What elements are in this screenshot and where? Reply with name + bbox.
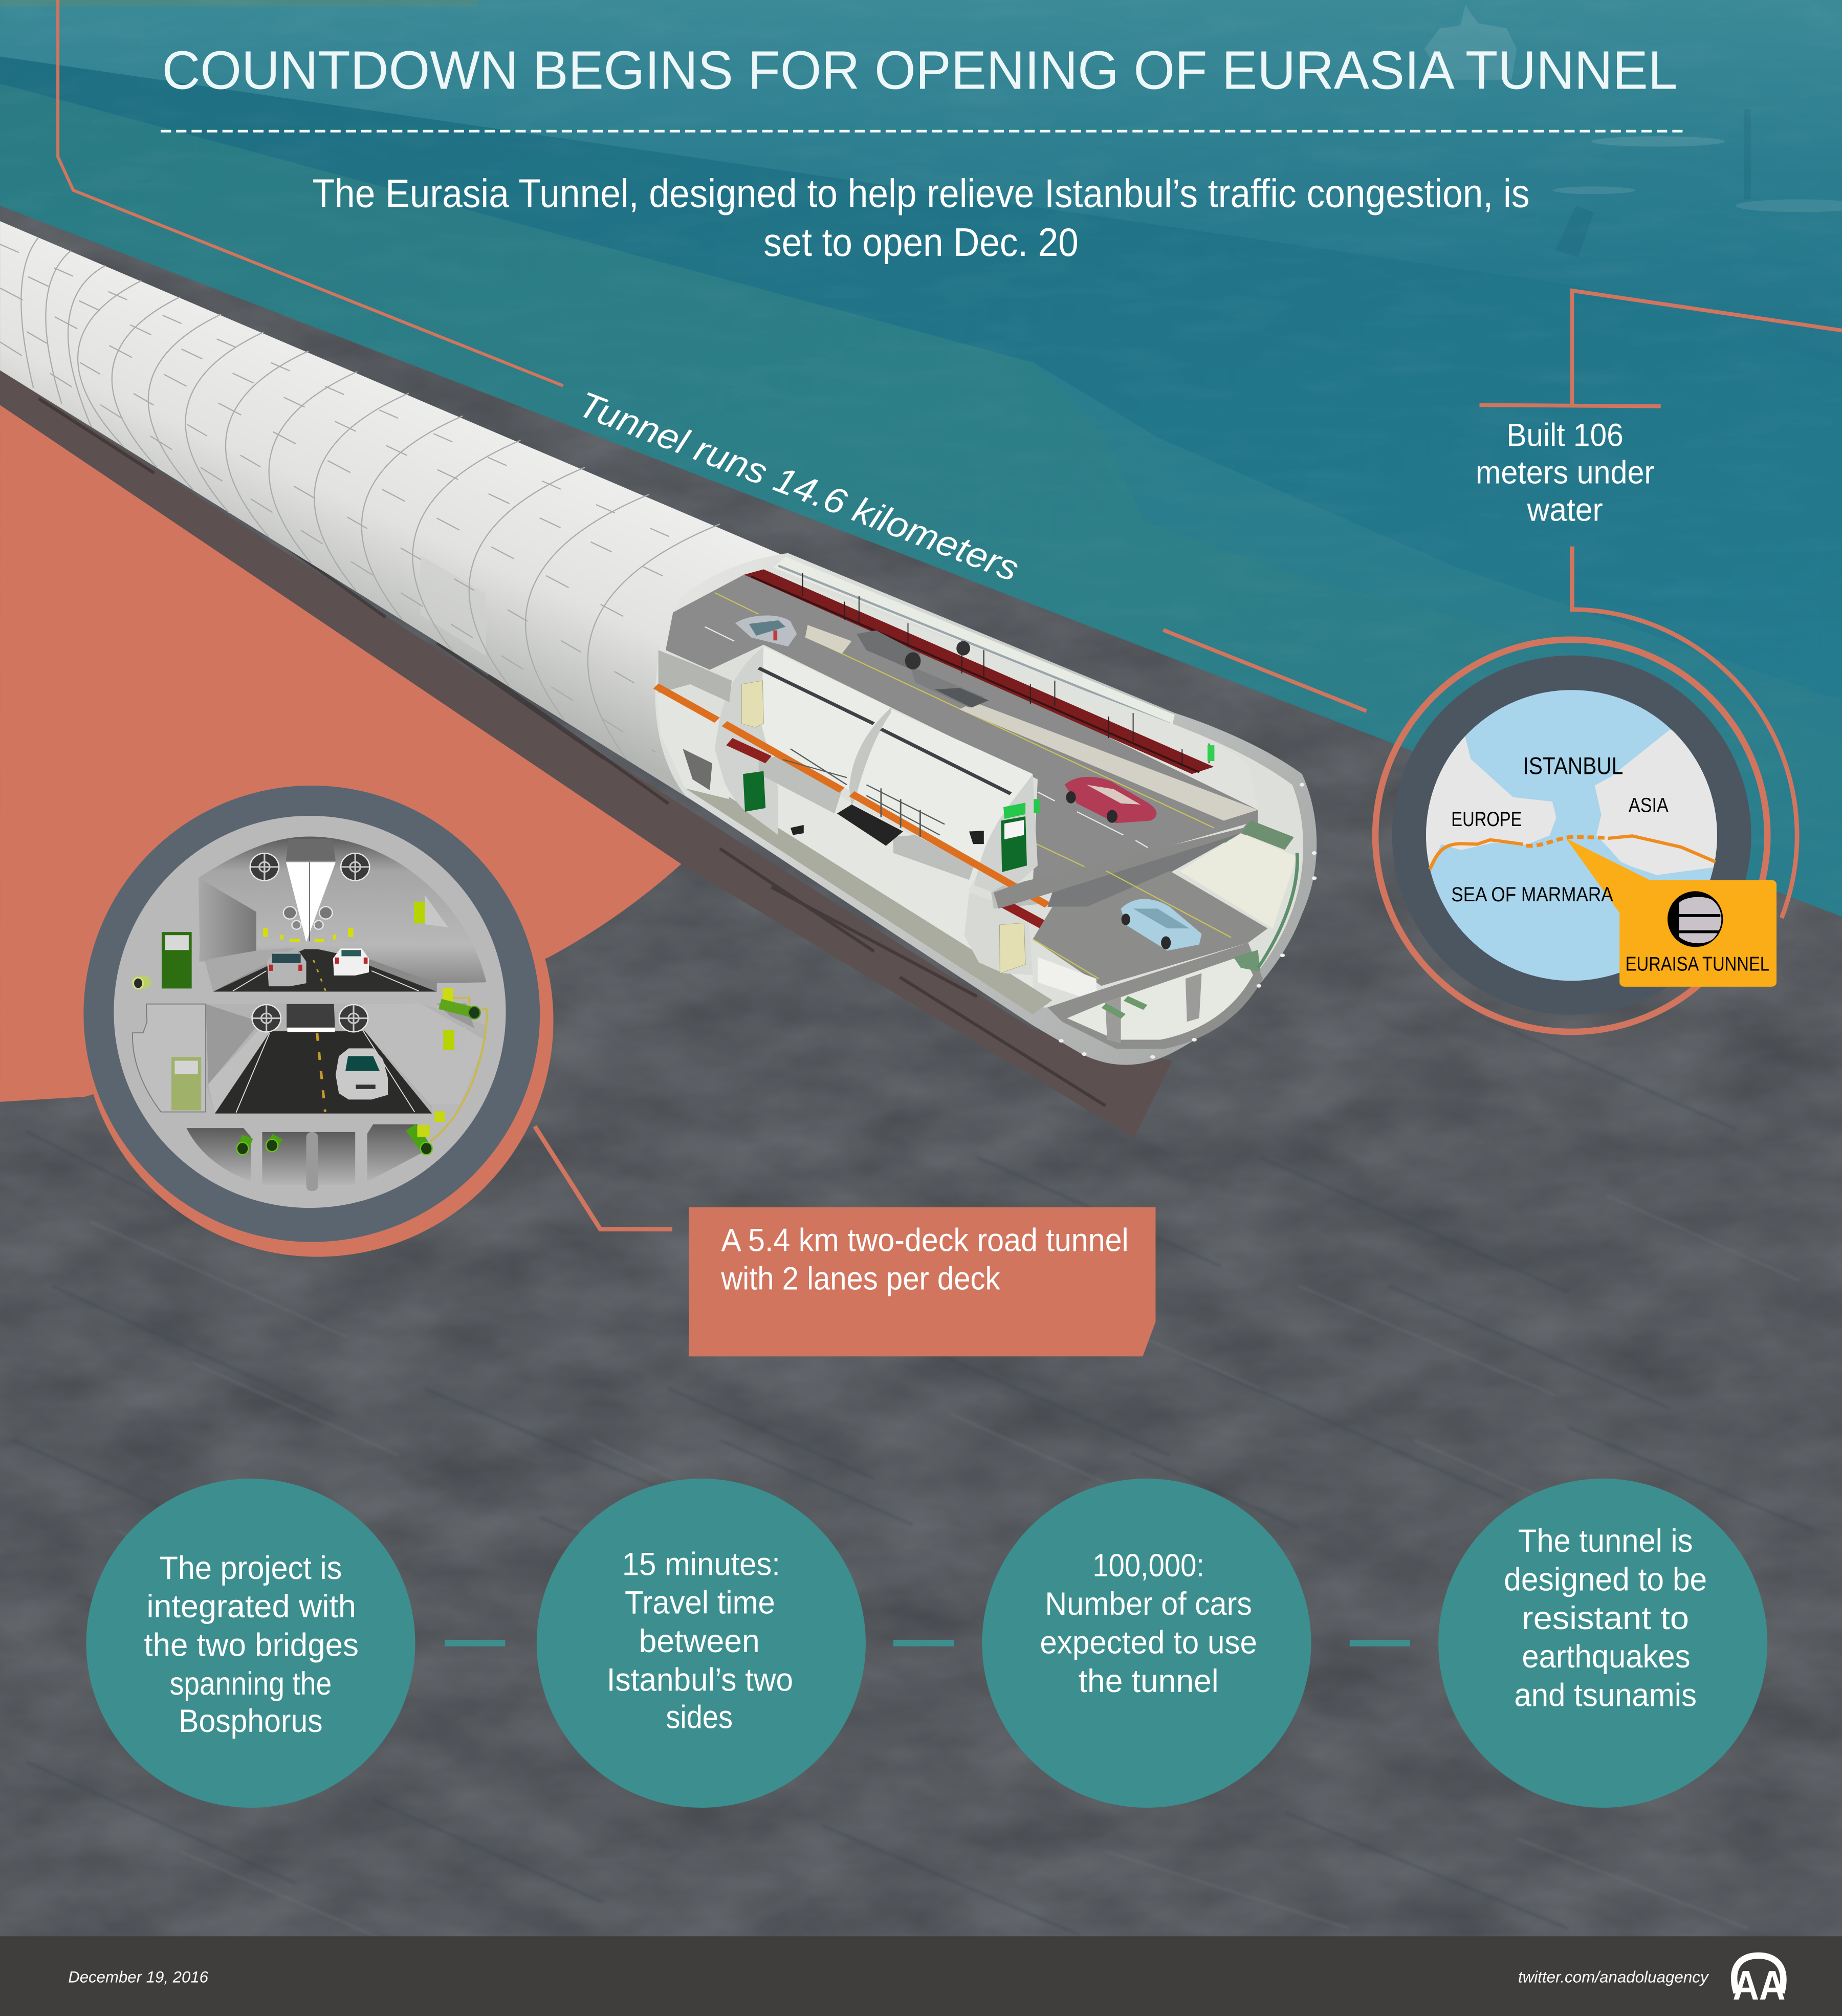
fact circle: bridges: The project is	[160, 1550, 342, 1586]
lower wall below the partition	[666, 727, 1047, 1007]
beige doors	[741, 681, 1025, 973]
fact circle: travel time: sides	[666, 1699, 733, 1735]
connector 2	[893, 1642, 954, 1644]
fact circle: cars: Number of cars	[1045, 1586, 1252, 1622]
depth callout text	[1476, 418, 1654, 528]
map labels: ISTANBUL	[1523, 752, 1623, 779]
fact circle: travel time: Travel time	[625, 1585, 775, 1621]
walkway slabs	[759, 756, 1047, 908]
median barrier and ventilation blocks	[805, 625, 1258, 820]
soil layer below tunnel	[0, 370, 1172, 1138]
fact circle: bridges: the two bridges	[144, 1628, 359, 1663]
upper fan hubs	[251, 854, 369, 880]
left angled wall	[199, 878, 256, 961]
map labels: EURAISA TUNNEL	[1626, 953, 1769, 976]
salmon wedge behind cross-section	[0, 405, 681, 1102]
map labels	[1451, 752, 1769, 976]
lower fans	[252, 1005, 368, 1032]
map outer ring	[1375, 640, 1767, 1032]
green emergency signs	[743, 771, 1232, 872]
grey car	[735, 616, 797, 646]
upper road	[213, 949, 437, 991]
right wall sign	[414, 895, 448, 927]
fact circle: travel time	[537, 1479, 866, 1808]
subtitle	[313, 171, 1529, 265]
depth callout text: Built 106	[1506, 418, 1624, 453]
fact circle: travel time: Istanbul’s two	[607, 1662, 793, 1698]
callout line: tunnel end	[1164, 630, 1366, 711]
callout line: top left to tunnel label	[58, 0, 563, 386]
lower left service room	[133, 1004, 206, 1112]
lower road	[215, 1031, 432, 1114]
depth callout leader	[1480, 291, 1842, 406]
lower deck room	[206, 1003, 486, 1114]
fact circle: earthquakes: The tunnel is	[1518, 1523, 1693, 1559]
ceiling lights	[286, 839, 336, 942]
map labels: ASIA	[1629, 793, 1669, 816]
fact circle: bridges: spanning the	[170, 1666, 332, 1702]
lower right sign	[443, 1027, 466, 1051]
fact circle: earthquakes	[1438, 1479, 1767, 1808]
route	[1430, 836, 1716, 869]
blue car	[1121, 899, 1202, 950]
callout box: two-deck tunnel	[689, 1207, 1155, 1356]
locator map	[1375, 640, 1777, 1032]
bottom service chamber	[1047, 943, 1263, 1049]
cut shell outline	[655, 553, 1317, 1065]
lime wall lights	[263, 928, 353, 942]
subtitle: The Eurasia Tunnel, designed to help relieve Istanbul’s traffic congestion, is	[313, 171, 1529, 215]
upper right junction box	[437, 988, 480, 1028]
map labels: SEA OF MARMARA	[1451, 883, 1613, 906]
fact circle: cars: the tunnel	[1079, 1663, 1219, 1699]
footer twitter handle: twitter.com/anadoluagency	[1518, 1968, 1709, 1986]
upper fans	[250, 853, 369, 929]
left lower wall	[205, 947, 296, 991]
red cable tray	[744, 569, 1214, 774]
lower deck markings	[1033, 871, 1231, 979]
tunnel length label: Tunnel runs 14.6 kilometers	[573, 383, 1024, 589]
tunnel section of route	[1526, 837, 1605, 846]
cross-section drawing	[131, 836, 488, 1191]
agency logo: AA	[1733, 1962, 1785, 2008]
footer date: December 19, 2016	[68, 1968, 209, 1986]
red conduits	[729, 742, 1060, 934]
tunnel icon	[1668, 891, 1723, 947]
fact circle: earthquakes: earthquakes	[1522, 1639, 1691, 1675]
grey ring	[83, 786, 540, 1242]
left chamber wall	[656, 684, 729, 799]
white dashed lane marks	[705, 627, 1148, 932]
title: COUNTDOWN BEGINS FOR OPENING OF EURASIA TUNNEL	[162, 40, 1677, 100]
green pipes	[237, 1111, 445, 1155]
upper back wall	[773, 557, 1175, 726]
depth callout text: meters under	[1476, 455, 1654, 491]
lower deck road	[1033, 871, 1268, 986]
far left grey block	[659, 650, 732, 702]
map shapes	[1396, 690, 1777, 987]
footer bar	[0, 1936, 1842, 2016]
lower bench strip	[685, 785, 1052, 1014]
subtitle: set to open Dec. 20	[763, 220, 1079, 265]
fact circle: travel time: between	[639, 1623, 760, 1659]
callout box	[1619, 880, 1777, 987]
orange pipe	[656, 686, 1047, 905]
back parapet	[763, 569, 1258, 810]
tunnel outer shell with concrete rings	[0, 221, 823, 818]
partition bays	[715, 646, 1038, 975]
fact circle: earthquakes: designed to be	[1504, 1562, 1707, 1597]
lower right wall	[362, 1003, 486, 1104]
callout leader: cross-section	[535, 1126, 672, 1229]
sea background	[0, 0, 1842, 926]
connector 1	[445, 1642, 505, 1644]
bottom chambers	[186, 1124, 432, 1185]
yellow cable	[430, 1008, 488, 1141]
shadow under left chamber	[683, 749, 712, 790]
fact circle: cars: 100,000:	[1092, 1548, 1204, 1584]
fact circle: bridges: Bosphorus	[179, 1703, 323, 1739]
upper deck room	[199, 836, 487, 991]
fact circle: cars: expected to use	[1040, 1625, 1257, 1661]
lower deck back wall and shade	[1047, 820, 1297, 928]
cross-section circle	[82, 785, 554, 1257]
fact circle: earthquakes: and tsunamis	[1514, 1678, 1697, 1714]
salmon disc	[82, 785, 554, 1257]
depth callout text: water	[1526, 492, 1603, 528]
upper cars	[267, 948, 369, 986]
railings and black trays	[783, 749, 984, 846]
map labels: EUROPE	[1451, 808, 1522, 831]
right lower wall	[316, 949, 437, 991]
lower left wall	[206, 1004, 260, 1084]
road markings	[715, 593, 1214, 875]
back wall shadow line	[778, 566, 1170, 724]
concrete disc	[114, 816, 506, 1208]
lower car	[336, 1048, 388, 1099]
central drain pipe	[306, 1132, 318, 1191]
fact circle: travel time: 15 minutes:	[622, 1546, 780, 1582]
tunnel cutaway	[655, 553, 1317, 1065]
map dark ring	[1392, 656, 1751, 1015]
lower fan hubs	[253, 1005, 367, 1031]
fact circle: earthquakes: resistant to	[1522, 1600, 1689, 1636]
callout box: two-deck tunnel: A 5.4 km two-deck road tunnel	[721, 1222, 1129, 1258]
lower ceiling strip	[287, 1004, 335, 1032]
red car	[1065, 777, 1156, 823]
tunnel interior	[663, 566, 1303, 1047]
pipe upper left	[131, 976, 151, 989]
fact circle: bridges: integrated with	[146, 1589, 356, 1624]
white barrier	[1038, 957, 1097, 1002]
bolts	[1059, 783, 1317, 1059]
title divider	[161, 131, 1684, 132]
right side conduit	[1258, 853, 1298, 968]
lower left kerb	[208, 1028, 270, 1114]
fact circle: cars	[982, 1479, 1311, 1808]
green door upper	[162, 932, 192, 988]
callout box: two-deck tunnel: with 2 lanes per deck	[720, 1261, 1000, 1297]
fact circle: bridges	[86, 1479, 415, 1808]
upper slab edge	[994, 810, 1258, 908]
callout pointer	[1566, 838, 1649, 915]
upper deck road	[666, 575, 1258, 885]
connector 3	[1350, 1642, 1410, 1644]
leader arc to locator map	[1572, 547, 1797, 918]
